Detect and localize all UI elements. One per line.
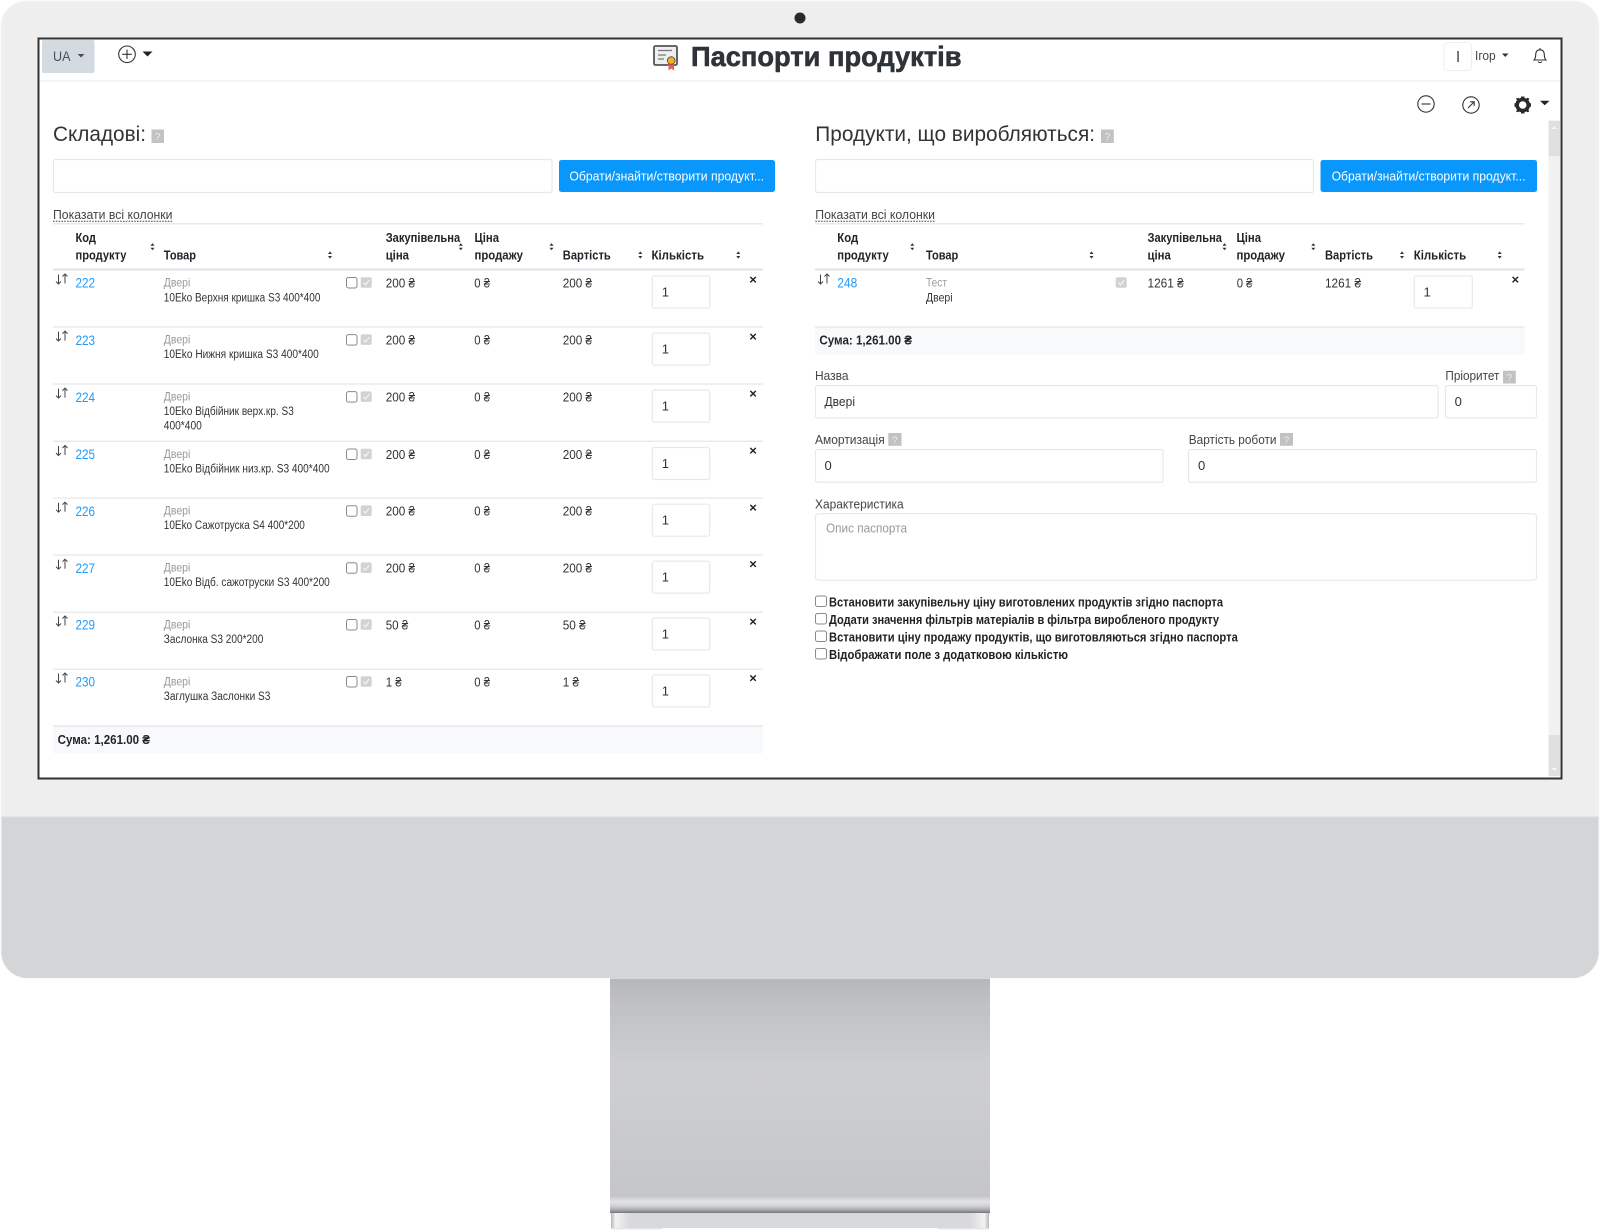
table header: Закупівельна: [386, 230, 461, 245]
table header: Ціна: [1236, 230, 1262, 245]
field: name: Двері: [824, 394, 855, 409]
row: 227: 10Eko Відб. сажотруски S3 400*200: [164, 577, 330, 589]
row: 225: 200 ₴: [563, 448, 592, 462]
button: select product: Обрати/знайти/створити продукт...: [569, 168, 764, 184]
row: 222: 1: [662, 284, 669, 300]
row: 225: Двері: [164, 449, 190, 461]
field: priority: ?: [1507, 373, 1513, 384]
monitor stand: [610, 978, 990, 1230]
screen: [38, 38, 1562, 778]
product search input: [54, 160, 552, 192]
row: 230: Заглушка Заслонки S3: [164, 691, 270, 703]
field: priority: 0: [1455, 394, 1462, 409]
row: 227: 1: [662, 570, 669, 585]
header bar: [42, 40, 1546, 73]
button: select product: Обрати/знайти/створити продукт...: [1332, 168, 1526, 184]
row: 229: 50 ₴: [386, 618, 408, 632]
option: set purchase price: Встановити закупівельну ціну виготовлених продуктів згідно паспорта: [829, 595, 1224, 610]
row: 223: 200 ₴: [563, 334, 592, 348]
link: show all columns: Показати всі колонки: [53, 207, 172, 222]
row: 224: 1: [662, 399, 669, 414]
row: 248: ×: [1512, 272, 1520, 287]
table: components: [53, 223, 763, 753]
heading: Складові: ?: [155, 132, 161, 143]
row: 248: 1: [1424, 284, 1431, 300]
user menu: [1444, 42, 1508, 70]
field: priority: [1445, 368, 1536, 418]
title: Паспорти продуктів: [691, 41, 962, 72]
table header: Код: [837, 230, 859, 245]
row: 229: ×: [749, 614, 757, 629]
field: name: [815, 368, 1438, 418]
table total: [53, 725, 763, 753]
scrollbar: [1548, 121, 1560, 776]
table header: Кількість: [1414, 248, 1466, 262]
row: 227: 200 ₴: [386, 562, 415, 576]
table: produced products: [815, 223, 1524, 355]
toolbar icons: [1418, 96, 1550, 114]
table total: Сума: 1,261.00 ₴: [819, 333, 912, 348]
heading: produced products: ?: [1105, 132, 1111, 143]
row: 224: Двері: [164, 392, 190, 404]
table header: Вартість: [1325, 248, 1373, 262]
option checkboxes: [816, 595, 1238, 662]
row: 223: 0 ₴: [474, 334, 490, 348]
row: 226: 0 ₴: [474, 505, 490, 519]
row: 248: Тест: [926, 278, 948, 290]
button: select product: [1320, 160, 1537, 192]
row: 227: Двері: [164, 563, 190, 575]
row: 223: 223: [76, 332, 95, 348]
icon: add menu: [119, 46, 152, 63]
field: description: Опис паспорта: [826, 521, 908, 536]
row: 222: 222: [76, 275, 95, 291]
row: 230: ×: [749, 670, 757, 685]
icon: bell: [1534, 48, 1546, 63]
row: 229: 1: [662, 626, 669, 642]
row: 248: 1261 ₴: [1148, 276, 1184, 290]
row: 223: 200 ₴: [386, 334, 415, 348]
table header: [815, 223, 1524, 270]
table header: Код: [76, 230, 97, 245]
row: 248: 1261 ₴: [1325, 276, 1361, 290]
field: labor cost: ?: [1284, 436, 1290, 446]
row: 224: ×: [749, 386, 757, 401]
row: 226: 200 ₴: [563, 505, 592, 519]
row: 222: 200 ₴: [386, 276, 415, 290]
table header: Кількість: [652, 248, 704, 262]
row: 230: 1 ₴: [386, 676, 402, 690]
table header: Товар: [164, 248, 196, 262]
table header: продукту: [76, 248, 127, 262]
heading: Складові: Складові:: [53, 123, 146, 146]
row: 223: ×: [749, 329, 757, 344]
row: 229: Заслонка S3 200*200: [164, 634, 263, 646]
row: 222: Двері: [164, 278, 190, 290]
row: 229: 229: [76, 617, 95, 633]
row: 227: 227: [76, 560, 95, 576]
heading: produced products: Продукти, що виробляються:: [815, 123, 1095, 146]
row: 229: 50 ₴: [563, 618, 586, 632]
row: 224: 200 ₴: [386, 391, 415, 405]
icon: open external: [1463, 97, 1479, 113]
option: set selling price: Встановити ціну продажу продуктів, що виготовляються згідно паспорта: [829, 630, 1238, 645]
table header: ціна: [1148, 248, 1171, 262]
table header: продажу: [474, 248, 524, 262]
row: 226: 1: [662, 513, 669, 528]
option: add filter values: Додати значення фільтрів матеріалів в фільтра виробленого продукту: [829, 612, 1220, 627]
row: 226: Двері: [164, 506, 190, 518]
panel: components (Складові): [53, 123, 775, 753]
option: extra quantity field: Відображати поле з додатковою кількістю: [829, 647, 1068, 662]
row: 230: 0 ₴: [474, 676, 490, 690]
table header: Вартість: [563, 248, 611, 262]
row: 224: 10Eko Відбійник верх.кр. S3: [164, 406, 294, 418]
monitor bezel: [1, 1, 1599, 978]
field: labor cost: Вартість роботи: [1189, 432, 1276, 447]
row: 222: 200 ₴: [563, 276, 592, 290]
icon: settings gear: [1514, 96, 1550, 114]
table header: продукту: [837, 248, 889, 262]
row: 224: 200 ₴: [563, 391, 592, 405]
field: priority: Пріоритет: [1445, 368, 1499, 383]
row: 230: 1 ₴: [563, 676, 579, 690]
row: 227: ×: [749, 557, 757, 572]
row: 223: [53, 326, 763, 365]
row: 224: 0 ₴: [474, 391, 490, 405]
field: labor cost: [1188, 432, 1536, 482]
table header: продажу: [1236, 248, 1286, 262]
row: 225: 10Eko Відбійник низ.кр. S3 400*400: [164, 464, 330, 476]
field: description: [815, 496, 1536, 580]
row: 230: 1: [662, 684, 669, 698]
row: 225: [53, 441, 763, 480]
row: 248: 0 ₴: [1237, 276, 1252, 290]
table header: Закупівельна: [1148, 230, 1223, 245]
row: 222: 0 ₴: [474, 276, 490, 290]
field: description: Характеристика: [815, 496, 904, 511]
row: 226: [53, 497, 763, 536]
product search input: [816, 160, 1314, 192]
field: amortization: ?: [892, 436, 898, 446]
table header: ціна: [386, 248, 410, 262]
icon: camera: [794, 12, 806, 24]
language button: [42, 40, 94, 73]
row: 225: ×: [749, 443, 757, 458]
row: 229: 0 ₴: [474, 618, 490, 632]
row: 227: 200 ₴: [563, 562, 592, 576]
row: 225: 200 ₴: [386, 448, 415, 462]
table header: Ціна: [474, 230, 500, 245]
row: 230: [53, 669, 763, 707]
row: 222: 10Eko Верхня кришка S3 400*400: [164, 292, 320, 304]
field: amortization: 0: [824, 458, 832, 473]
row: 225: 225: [76, 446, 95, 462]
row: 224: 224: [76, 389, 95, 405]
row: 230: 230: [76, 674, 95, 690]
table header: [53, 223, 763, 270]
row: 226: 10Eko Сажотруска S4 400*200: [164, 520, 305, 532]
row: 248: [818, 272, 1520, 308]
user menu: Ігор: [1475, 48, 1496, 63]
icon: certificate: [654, 46, 677, 70]
row: 225: 0 ₴: [474, 448, 490, 462]
panel: produced products (Продукти, що виробляються): [815, 123, 1537, 662]
button: select product: [559, 160, 775, 192]
row: 226: 200 ₴: [386, 505, 415, 519]
row: 227: 0 ₴: [474, 562, 490, 576]
row: 248: 248: [837, 275, 857, 291]
row: 223: Двері: [164, 335, 190, 347]
table header: Товар: [926, 248, 958, 262]
icon: collapse: [1418, 96, 1434, 112]
field: name: Назва: [815, 368, 849, 383]
row: 248: Двері: [926, 292, 953, 304]
row: 224: [53, 383, 763, 433]
row: 222: ×: [749, 272, 757, 287]
row: 229: [53, 612, 763, 650]
row: 223: 10Eko Нижня кришка S3 400*400: [164, 349, 319, 361]
row: 230: Двері: [164, 676, 190, 688]
row: 222: [56, 272, 757, 308]
row: 227: [53, 554, 763, 593]
row: 224: 400*400: [164, 421, 202, 433]
row: 226: 226: [76, 503, 95, 519]
field: amortization: [815, 432, 1163, 482]
field: amortization: Амортизація: [815, 432, 885, 447]
row: 226: ×: [749, 500, 757, 515]
table total: Сума: 1,261.00 ₴: [58, 732, 150, 747]
row: 229: Двері: [164, 620, 190, 632]
language button: UA: [53, 48, 71, 64]
table total: [815, 326, 1524, 355]
row: 225: 1: [662, 456, 669, 471]
row: 223: 1: [662, 342, 669, 357]
field: labor cost: 0: [1198, 458, 1205, 473]
link: show all columns: Показати всі колонки: [815, 207, 935, 222]
